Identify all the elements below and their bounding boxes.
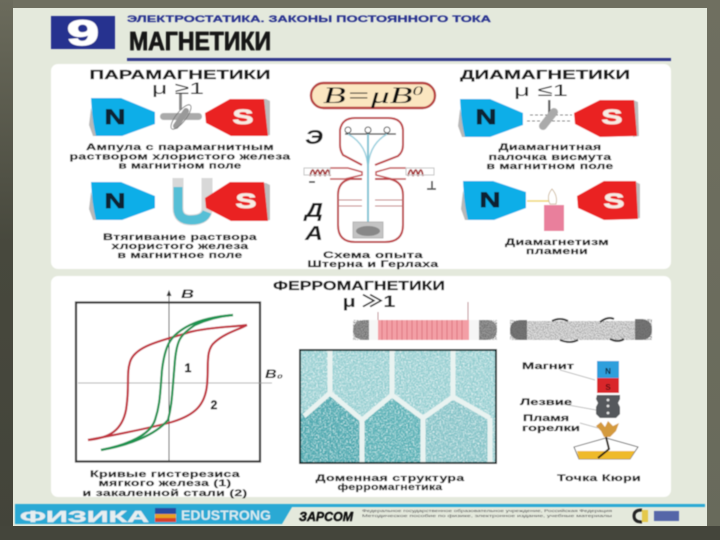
- labels: Curie parts: Пламя: [523, 413, 569, 423]
- section subtitle: ЭЛЕКТРОСТАТИКА. ЗАКОНЫ ПОСТОЯННОГО ТОКА: [127, 14, 491, 25]
- icon: publisher flag: [155, 508, 176, 522]
- heading: diamagnetics: [460, 67, 630, 100]
- labels: apparatus parts: [303, 127, 324, 245]
- footer brand: EDUSTRONG: [181, 507, 271, 523]
- labels: Curie parts: Лезвие: [520, 397, 572, 407]
- panel: ferromagnetics: [51, 276, 671, 498]
- caption: Stern-Gerlach: Штерна и Герлаха: [308, 259, 440, 269]
- formula pill: 0: [412, 83, 424, 98]
- labels: Curie parts: Магнит: [522, 361, 575, 371]
- footer logo: ЗАРСОМ: [299, 509, 354, 524]
- caption: bismuth rod: [486, 142, 614, 171]
- footer imprint: [362, 509, 613, 518]
- diagram: Curie point: N: [605, 367, 611, 376]
- formula pill: B=μB: [323, 83, 378, 108]
- caption: hysteresis: Кривые гистерезиса: [90, 469, 241, 479]
- caption: domain structure: [316, 473, 466, 492]
- caption: flame: Диамагнетизм: [505, 237, 609, 247]
- caption: hysteresis: [82, 469, 248, 498]
- footer imprint: Методическое пособие по физике, электронное издание, учебные материалы: [362, 514, 613, 518]
- diagram: Curie point: [557, 361, 638, 459]
- caption: U-tube: [103, 232, 258, 260]
- magnets: flame: S: [604, 190, 624, 213]
- caption: U-tube: в магнитное поле: [118, 250, 242, 260]
- diagram: Stern-Gerlach apparatus: [304, 118, 436, 242]
- magnets: ampoule para: S: [232, 106, 254, 129]
- footer subject name: ФИЗИКА: [20, 509, 150, 526]
- header rule: [127, 58, 671, 61]
- caption: ampoule para: [70, 142, 292, 170]
- chart: hysteresis curves: 1: [185, 361, 192, 375]
- heading: diamagnetics: ДИАМАГНЕТИКИ: [460, 67, 630, 82]
- chart: hysteresis curves: 2: [211, 398, 218, 412]
- labels: apparatus parts: А: [304, 223, 323, 245]
- caption: domain structure: ферромагнетика: [338, 482, 444, 492]
- magnets: ampoule para: [89, 94, 270, 136]
- image: domain structure: [300, 350, 496, 463]
- magnets: flame: N: [480, 189, 500, 212]
- magnets: ampoule para: N: [104, 106, 126, 129]
- caption: bismuth rod: палочка висмута: [488, 152, 613, 162]
- chart: hysteresis curves: B: [181, 287, 194, 301]
- caption: Curie point: Точка Кюри: [557, 473, 641, 483]
- icon: wound coil on bar: [353, 302, 497, 340]
- number badge: [51, 14, 115, 53]
- caption: bismuth rod: в магнитном поле: [486, 161, 614, 171]
- labels: apparatus parts: Э: [305, 127, 324, 149]
- magnets: U-tube: S: [236, 190, 256, 213]
- heading: paramagnetics: ПАРАМАГНЕТИКИ: [90, 67, 270, 82]
- heading: diamagnetics: μ ≤1: [514, 81, 568, 100]
- heading: ferromagnetics: μ ≫1: [342, 292, 396, 311]
- footer band: [15, 504, 705, 526]
- magnets: flame: [461, 181, 640, 231]
- caption: Stern-Gerlach: [308, 250, 440, 269]
- caption: bismuth rod: Диамагнитная: [498, 142, 602, 152]
- heading: ferromagnetics: [273, 278, 445, 311]
- caption: Stern-Gerlach: Схема опыта: [323, 250, 424, 260]
- footer logos right: [634, 510, 679, 522]
- heading: paramagnetics: [90, 67, 270, 98]
- panel: para, dia and Stern-Gerlach: [51, 64, 671, 269]
- caption: domain structure: Доменная структура: [316, 473, 466, 483]
- labels: Curie parts: [520, 361, 580, 433]
- caption: ampoule para: в магнитном поле: [118, 160, 242, 170]
- labels: Curie parts: горелки: [522, 423, 580, 433]
- number badge: 9: [67, 14, 99, 53]
- magnets: bismuth rod: N: [476, 106, 496, 129]
- heading: ferromagnetics: ФЕРРОМАГНЕТИКИ: [273, 278, 445, 293]
- magnets: bismuth rod: [458, 99, 639, 137]
- icon: bar with iron filings: [510, 318, 652, 342]
- heading: paramagnetics: μ ≥1: [152, 79, 204, 98]
- magnets: U-tube: [89, 178, 270, 221]
- footer imprint: Федеральное государственное образовательное учреждение, Российская Федерация: [362, 509, 612, 513]
- caption: ampoule para: раствором хлористого железа: [70, 152, 292, 162]
- magnets: U-tube: N: [104, 190, 126, 213]
- chart: hysteresis curves: [76, 287, 283, 462]
- caption: U-tube: хлористого железа: [112, 241, 250, 251]
- diagram: Curie point: S: [605, 383, 611, 392]
- caption: flame: [505, 237, 609, 256]
- formula pill: [311, 83, 435, 108]
- labels: apparatus parts: Д: [303, 200, 323, 222]
- title: МАГНЕТИКИ: [129, 26, 271, 56]
- caption: hysteresis: мягкого железа (1): [98, 478, 232, 488]
- chart: hysteresis curves: B₀: [265, 367, 283, 381]
- caption: flame: пламени: [526, 246, 588, 256]
- caption: ampoule para: Ампула с парамагнитным: [86, 142, 274, 152]
- magnets: bismuth rod: S: [602, 106, 622, 129]
- caption: hysteresis: и закаленной стали (2): [82, 488, 248, 498]
- caption: U-tube: Втягивание раствора: [103, 232, 258, 242]
